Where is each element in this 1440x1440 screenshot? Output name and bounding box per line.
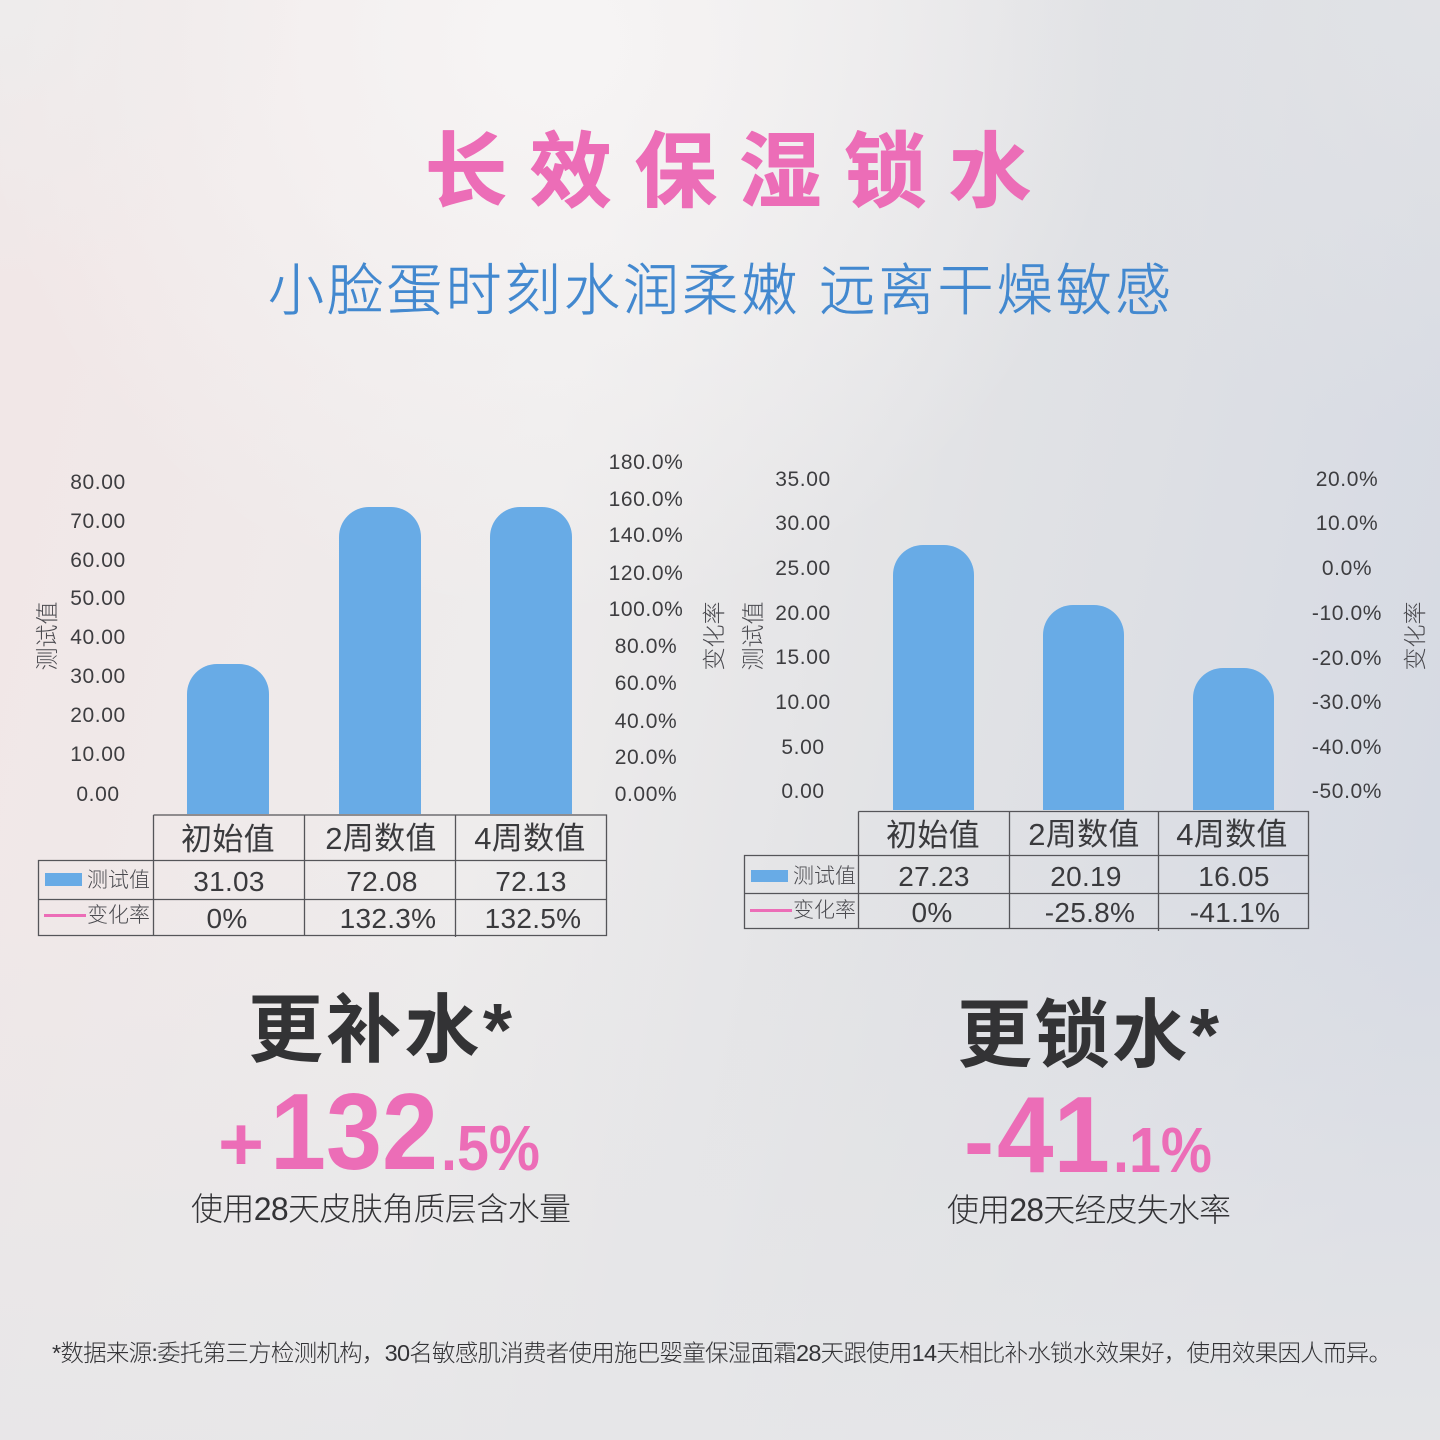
data table: 初始值 (181, 822, 275, 857)
panel: left chart (34, 451, 727, 937)
data table: 27.23 (898, 861, 970, 892)
data table: 20.19 (1050, 861, 1122, 892)
left axis labels: 10.00 (70, 743, 126, 766)
data table: 2周数值 (1028, 817, 1140, 852)
subtitle: 小脸蛋时刻水润柔嫩 远离干燥敏感 (268, 259, 1171, 322)
data table: 测试值 (793, 865, 856, 888)
percentage: .1% (1113, 1114, 1212, 1186)
heading: 更锁水* (957, 993, 1220, 1077)
left axis labels: 5.00 (781, 736, 825, 759)
right axis labels: 60.0% (615, 672, 677, 695)
left axis labels: 0.00 (781, 780, 825, 803)
right axis title: 变化率 (701, 602, 727, 670)
data table: 72.13 (495, 866, 567, 897)
data table: 2周数值 (325, 821, 437, 856)
right axis labels: 100.0% (609, 598, 683, 621)
left axis title: 测试值 (34, 602, 60, 670)
data table: 132.3% (340, 903, 436, 934)
left axis labels: 20.00 (70, 704, 126, 727)
left axis labels: 15.00 (775, 646, 831, 669)
right axis labels: -50.0% (1312, 780, 1382, 803)
data table: 31.03 (193, 866, 265, 897)
data table: 初始值 (886, 818, 980, 853)
percentage: 41 (997, 1074, 1110, 1196)
percentage: .5% (441, 1112, 540, 1184)
percentage: - (964, 1092, 994, 1192)
right axis labels: 80.0% (615, 635, 677, 658)
heading: 更补水* (248, 988, 513, 1072)
percentage: 132 (270, 1071, 438, 1193)
data table: 0% (911, 897, 953, 928)
right axis labels: 160.0% (609, 488, 683, 511)
caption: 使用28天皮肤角质层含水量 (191, 1191, 571, 1227)
data table: 测试值 (87, 869, 150, 892)
data table: 72.08 (346, 866, 418, 897)
data table: 132.5% (485, 903, 581, 934)
data table: 变化率 (87, 904, 150, 927)
right axis labels: -10.0% (1312, 602, 1382, 625)
left axis labels (70, 471, 126, 806)
left axis labels: 30.00 (775, 512, 831, 535)
right axis labels: -30.0% (1312, 691, 1382, 714)
left axis labels: 10.00 (775, 691, 831, 714)
right axis labels: 0.0% (1322, 557, 1372, 580)
data table: 16.05 (1198, 861, 1270, 892)
callout: right result (947, 993, 1231, 1228)
left axis labels: 40.00 (70, 626, 126, 649)
right axis labels: -40.0% (1312, 736, 1382, 759)
panel: right chart (740, 468, 1428, 931)
left axis title: 测试值 (740, 602, 766, 670)
data table: 4周数值 (1176, 817, 1288, 852)
footnote: *数据来源:委托第三方检测机构，30名敏感肌消费者使用施巴婴童保湿面霜28天跟使用14天相比补水锁水效果好，使用效果因人而异。 (52, 1340, 1392, 1366)
right axis labels: 120.0% (609, 562, 683, 585)
data table: 变化率 (793, 899, 856, 922)
left axis labels: 60.00 (70, 549, 126, 572)
right axis labels: -20.0% (1312, 647, 1382, 670)
right axis title: 变化率 (1402, 602, 1428, 670)
data table (38, 815, 606, 937)
left axis labels (775, 468, 831, 803)
left axis labels: 25.00 (775, 557, 831, 580)
percentage (218, 1071, 540, 1193)
left axis labels: 70.00 (70, 510, 126, 533)
right axis labels: 180.0% (609, 451, 683, 474)
left axis labels: 30.00 (70, 665, 126, 688)
right axis labels: 10.0% (1316, 512, 1378, 535)
data table: 0% (206, 903, 248, 934)
right axis labels (1312, 468, 1382, 803)
title: 长效保湿锁水 (425, 127, 1031, 218)
right axis labels: 40.0% (615, 710, 677, 733)
left axis labels: 50.00 (70, 587, 126, 610)
percentage (964, 1074, 1212, 1196)
callout: left result (191, 988, 571, 1227)
data table: -25.8% (1045, 897, 1135, 928)
caption: 使用28天经皮失水率 (947, 1192, 1231, 1228)
data table (744, 812, 1308, 931)
right axis labels: 20.0% (1316, 468, 1378, 491)
bars (187, 507, 572, 814)
right axis labels: 20.0% (615, 746, 677, 769)
right axis labels: 0.00% (615, 783, 677, 806)
left axis labels: 20.00 (775, 602, 831, 625)
right axis labels: 140.0% (609, 524, 683, 547)
left axis labels: 80.00 (70, 471, 126, 494)
left axis labels: 0.00 (76, 783, 120, 806)
right axis labels (609, 451, 683, 806)
data table: -41.1% (1190, 897, 1280, 928)
data table: 4周数值 (474, 821, 586, 856)
percentage: + (218, 1102, 264, 1187)
left axis labels: 35.00 (775, 468, 831, 491)
bars (893, 545, 1274, 810)
